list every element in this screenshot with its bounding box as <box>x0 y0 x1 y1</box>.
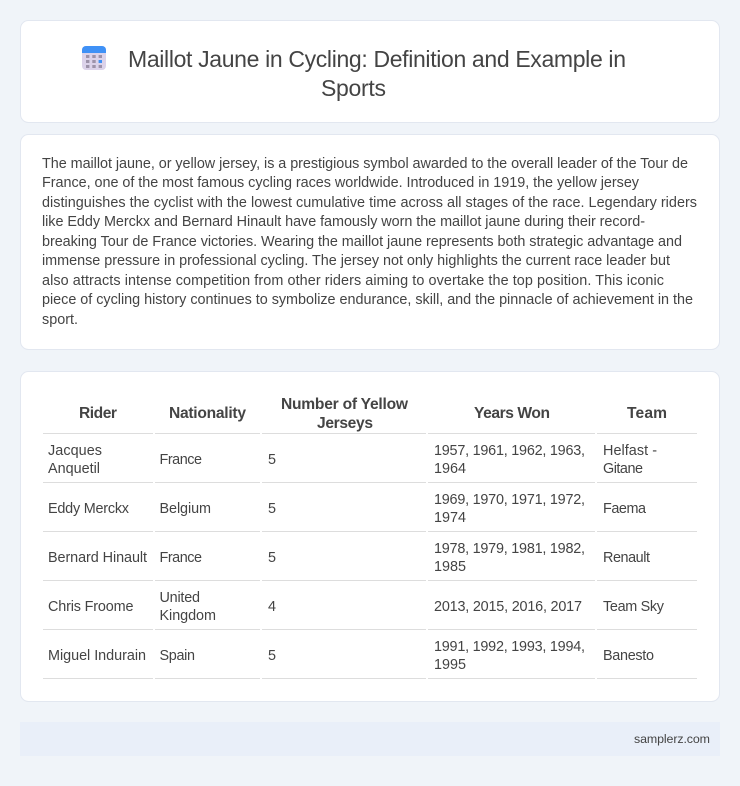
table row: Jacques Anquetil: France <box>160 452 202 468</box>
table row: Bernard Hinault <box>48 541 650 575</box>
table row: Jacques Anquetil <box>48 443 657 477</box>
table row: Bernard Hinault: 1978, 1979, 1981, 1982, <box>434 541 585 557</box>
table row: Chris Froome <box>48 590 665 624</box>
icon: calendar <box>82 46 106 70</box>
table row: Chris Froome: 4 <box>268 599 276 615</box>
table row: Bernard Hinault: Bernard Hinault <box>48 550 147 566</box>
table row: Chris Froome: Chris Froome <box>48 599 134 615</box>
panel: riders table <box>20 372 720 702</box>
table row: Bernard Hinault: France <box>160 550 202 566</box>
table row: Eddy Merckx: Eddy Merckx <box>48 501 130 517</box>
table row: Jacques Anquetil: 1957, 1961, 1962, 1963, <box>434 443 585 459</box>
table row: Eddy Merckx: 1969, 1970, 1971, 1972, <box>434 492 585 508</box>
table row: Miguel Indurain: Banesto <box>603 648 654 664</box>
table row: Chris Froome: United <box>160 590 200 606</box>
table row: Jacques Anquetil: Helfast - <box>603 443 657 459</box>
text block: description paragraph: breaking Tour de France victories. Wearing the maillot jaune represents both strategic advantage and <box>42 234 682 250</box>
table header row: Team <box>627 405 667 422</box>
table header row: Number of Yellow <box>281 396 409 413</box>
table header row: Years Won <box>474 405 550 422</box>
text block: description paragraph: distinguishes the cyclist with the lowest cumulative time across all stages of the race. Legendary riders <box>42 195 697 211</box>
table header row: Rider <box>79 405 117 422</box>
table row: Bernard Hinault: Renault <box>603 550 650 566</box>
text block: description paragraph: like Eddy Merckx and Bernard Hinault have famously worn the maillot jaune during their record- <box>42 214 645 230</box>
table row: Eddy Merckx: 5 <box>268 501 276 517</box>
table row: Jacques Anquetil: Gitane <box>603 461 643 477</box>
text block: description paragraph: The maillot jaune, or yellow jersey, is a prestigious symbol awarded to the overall leader of the Tour de <box>42 156 688 172</box>
table header row: Jerseys <box>317 415 373 432</box>
title: Sports <box>321 75 386 101</box>
table row: Miguel Indurain: 5 <box>268 648 276 664</box>
text block: description paragraph: sport. <box>42 312 78 328</box>
table row: Miguel Indurain: 1995 <box>434 657 466 673</box>
table row: Eddy Merckx: 1974 <box>434 510 466 526</box>
text block: description paragraph: France, one of the most famous cycling races worldwide. Introduced in 1919, the yellow jersey <box>42 175 640 191</box>
table row: Chris Froome: Kingdom <box>160 608 216 624</box>
table row: Miguel Indurain: 1991, 1992, 1993, 1994, <box>434 639 585 655</box>
text block: description paragraph: piece of cycling history continues to symbolize endurance, skill, and the pinnacle of achievement in the <box>42 292 693 308</box>
text block: description paragraph: immense pressure in professional cycling. The jersey not only highlights the current race leader but <box>42 253 670 269</box>
table row: Jacques Anquetil: Jacques <box>48 443 102 459</box>
table row: Miguel Indurain <box>48 639 654 673</box>
table row: Eddy Merckx <box>48 492 646 526</box>
table row: Miguel Indurain: Miguel Indurain <box>48 648 146 664</box>
table row: Eddy Merckx: Faema <box>603 501 646 517</box>
table header row <box>79 396 667 432</box>
table header row: Nationality <box>169 405 246 422</box>
title <box>128 46 626 101</box>
footer: samplerz.com <box>634 732 710 746</box>
table row: Chris Froome: 2013, 2015, 2016, 2017 <box>434 599 582 615</box>
title: Maillot Jaune in Cycling: Definition and Example in <box>128 46 626 72</box>
table row: Miguel Indurain: Spain <box>160 648 195 664</box>
text block: description paragraph <box>42 156 697 328</box>
table row: Bernard Hinault: 5 <box>268 550 276 566</box>
table row: Jacques Anquetil: 5 <box>268 452 276 468</box>
table row: Jacques Anquetil: Anquetil <box>48 461 100 477</box>
table row: Eddy Merckx: Belgium <box>160 501 211 517</box>
panel: description <box>20 134 720 350</box>
footer <box>20 722 720 756</box>
table row: Chris Froome: Team Sky <box>603 599 665 615</box>
table row: Jacques Anquetil: 1964 <box>434 461 466 477</box>
panel: title header <box>20 20 720 122</box>
table row: Bernard Hinault: 1985 <box>434 559 466 575</box>
text block: description paragraph: also attracts intense competition from other riders aiming to overtake the top position. This iconic <box>42 273 664 289</box>
